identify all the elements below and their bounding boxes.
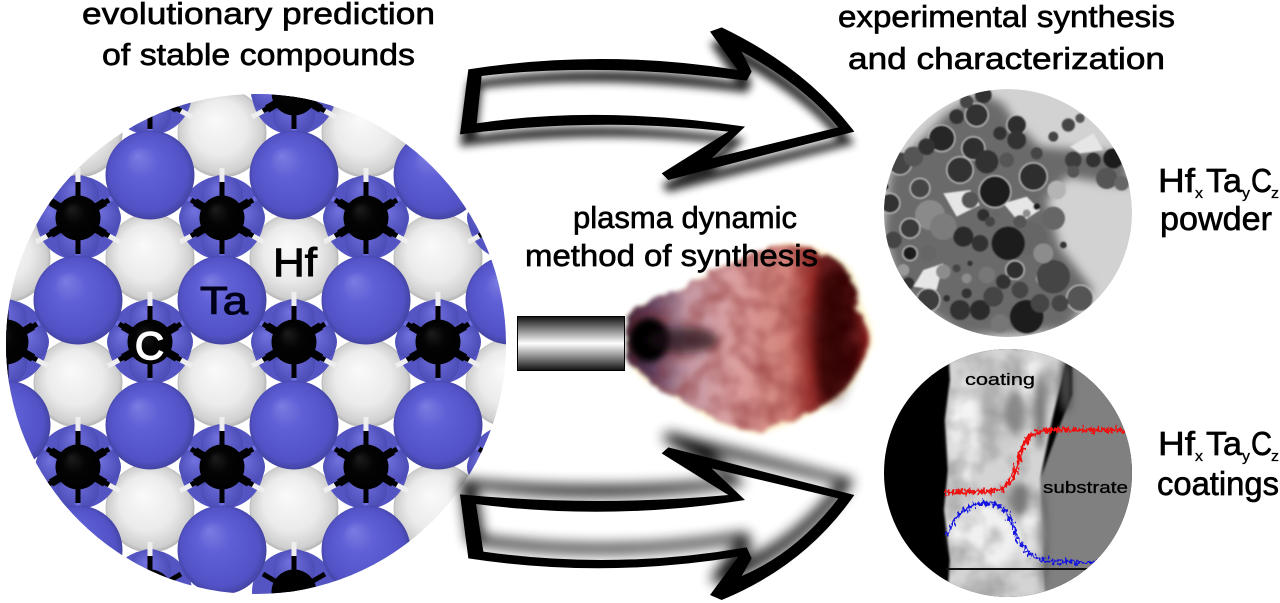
label: Hf: Hf xyxy=(273,241,318,285)
panel: powder micrograph xyxy=(880,87,1132,337)
label: powder formula: C xyxy=(1251,162,1272,199)
label: powder: powder xyxy=(1160,200,1272,237)
plasma torch tube xyxy=(518,316,624,370)
label: coatings formula: z xyxy=(1271,448,1279,465)
label: powder formula: y xyxy=(1242,185,1251,202)
heading: experimental synthesis: experimental synthesis xyxy=(838,0,1175,34)
heading: of stable compounds: of stable compounds xyxy=(102,37,415,72)
label: powder formula: Hf xyxy=(1158,162,1196,199)
heading: plasma dynamic: plasma dynamic xyxy=(573,200,797,235)
label: coatings formula: y xyxy=(1242,448,1251,465)
label: coatings formula xyxy=(1158,425,1279,465)
label: powder formula: Ta xyxy=(1206,162,1243,199)
blue line xyxy=(947,503,1100,563)
label: Ta: Ta xyxy=(200,280,248,323)
label: coatings formula: Hf xyxy=(1158,425,1196,462)
arrow: bottom xyxy=(460,432,854,600)
label: powder formula: z xyxy=(1271,185,1279,202)
arrow: top xyxy=(460,27,854,192)
label: substrate: substrate xyxy=(1043,478,1128,497)
label: coating: coating xyxy=(965,370,1035,389)
label: coatings: coatings xyxy=(1157,465,1279,502)
label: powder formula: x xyxy=(1195,185,1204,202)
label: coatings formula: Ta xyxy=(1206,425,1243,462)
label: coatings formula: x xyxy=(1195,448,1204,465)
panel: coating micrograph xyxy=(880,345,1140,603)
heading: and characterization: and characterization xyxy=(848,41,1165,76)
heading: method of synthesis: method of synthesis xyxy=(525,238,818,273)
plasma flame xyxy=(628,243,873,434)
coating texture xyxy=(946,350,1062,597)
label: coatings formula: C xyxy=(1251,425,1272,462)
red line xyxy=(945,430,1128,493)
label: C: C xyxy=(135,325,164,368)
label: powder formula xyxy=(1158,162,1279,202)
panel: atomic lattice circle xyxy=(6,94,506,594)
